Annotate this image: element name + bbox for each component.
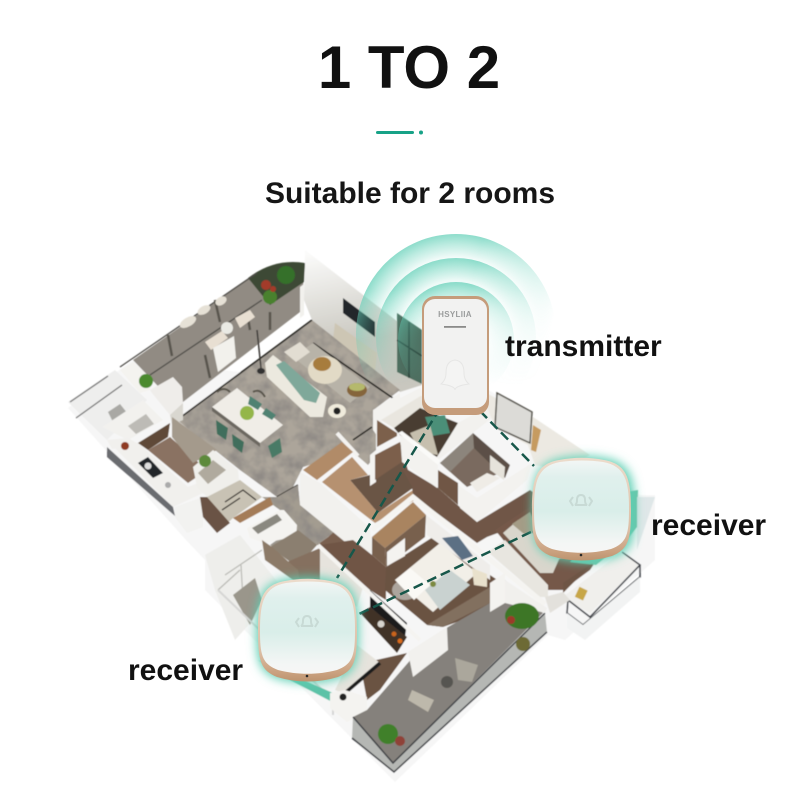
tv wall	[370, 590, 407, 637]
bathroom	[438, 433, 532, 522]
wireless signal arcs	[356, 234, 550, 376]
kitchen	[68, 362, 240, 533]
armchair room	[373, 388, 493, 488]
marble back wall with tv	[304, 250, 422, 392]
long wall	[320, 550, 363, 607]
bell mark	[296, 616, 318, 627]
title: 1 TO 2	[318, 34, 500, 101]
master bedroom	[318, 497, 545, 653]
lower balcony	[352, 573, 547, 772]
central corridor floor	[400, 465, 560, 543]
wood cabinet	[372, 502, 426, 548]
bed	[395, 543, 477, 612]
label: receiver left: receiver	[128, 654, 243, 687]
living room	[177, 320, 400, 497]
brand label: HSYLIIA	[438, 310, 472, 319]
wood l-shaped counters	[300, 442, 560, 600]
receiver glow left	[258, 579, 357, 682]
plan: faint outer edge	[68, 330, 655, 782]
balcony plants	[378, 724, 398, 744]
terrace	[120, 262, 312, 420]
coffee table	[308, 356, 342, 384]
small rooms lower left	[200, 480, 353, 640]
floor plan illustration	[68, 250, 655, 782]
partition blocks	[373, 393, 400, 440]
armchair	[347, 383, 367, 397]
window and dressing wall	[480, 390, 590, 470]
receiver glow right	[534, 458, 633, 560]
divider accent	[376, 130, 423, 134]
glass room	[205, 535, 280, 640]
side table	[328, 404, 346, 418]
receiver left device	[258, 579, 357, 682]
sofa	[265, 355, 327, 417]
white pillars	[408, 627, 448, 677]
signal dashed links	[337, 408, 534, 614]
bell mark	[570, 495, 592, 506]
receiver right device	[532, 458, 631, 560]
right bedroom	[488, 490, 638, 597]
lower left room beside receiver	[218, 590, 407, 722]
right balcony	[545, 497, 655, 640]
rug	[293, 343, 370, 403]
chevron wall	[372, 497, 545, 604]
dining table	[212, 388, 283, 443]
label: receiver right: receiver	[651, 509, 766, 542]
label: transmitter: transmitter	[505, 330, 662, 363]
transmitter device	[422, 296, 489, 415]
subtitle: Suitable for 2 rooms	[265, 177, 555, 210]
bell emboss	[441, 360, 469, 390]
floor lamp	[257, 330, 261, 368]
